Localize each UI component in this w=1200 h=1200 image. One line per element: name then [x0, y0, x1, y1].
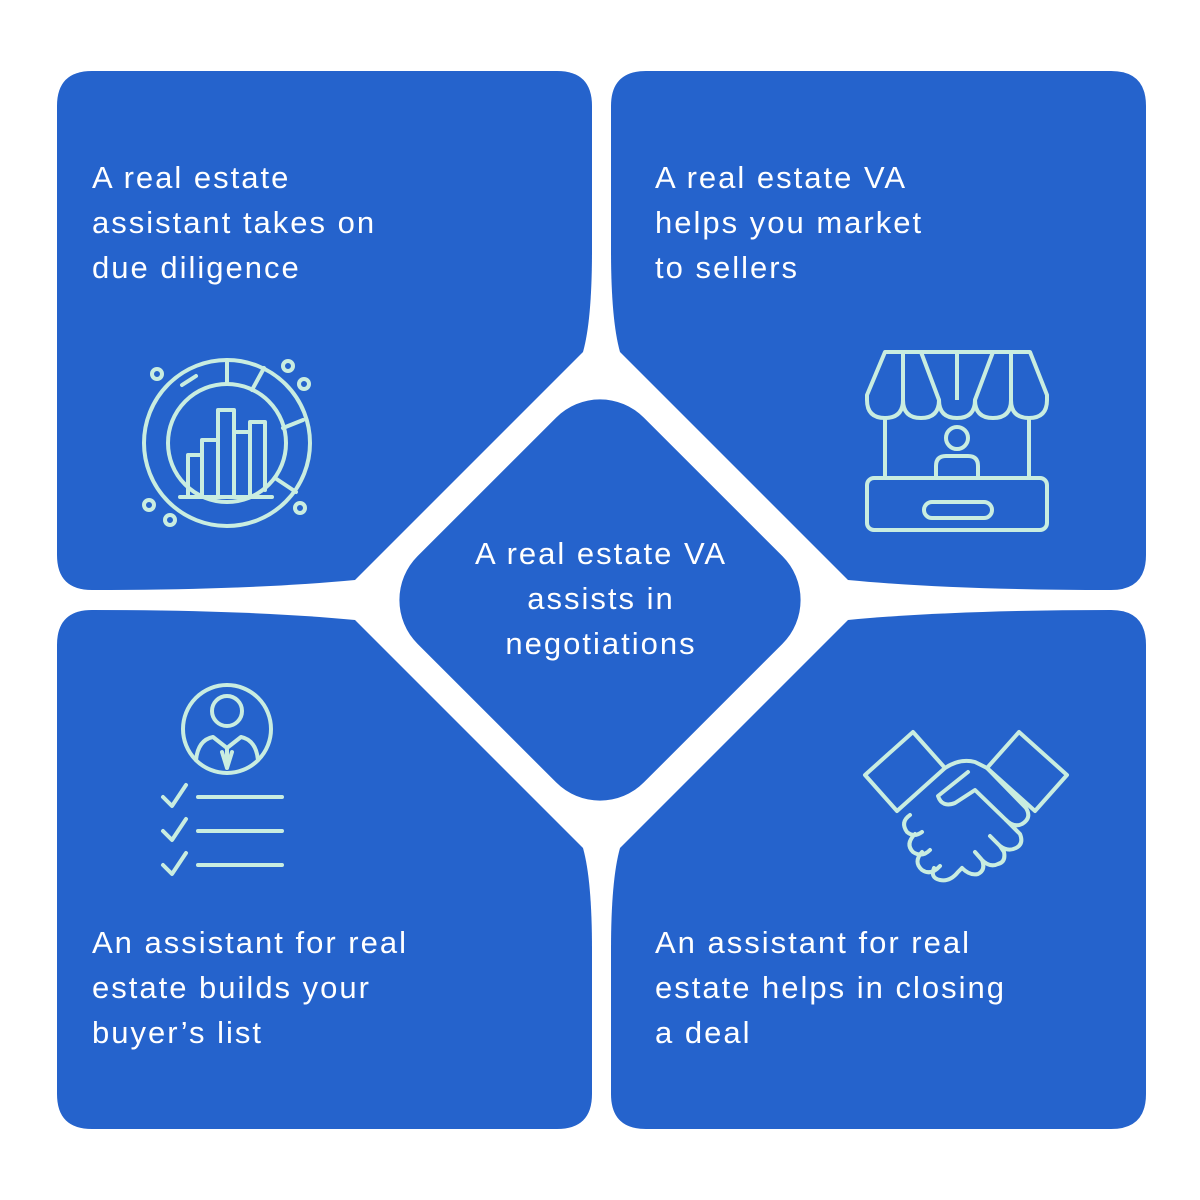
panel: negotiations center diamond — [374, 374, 826, 826]
text: due diligence: due diligence — [92, 250, 301, 285]
icon: chart donut — [144, 360, 310, 526]
text: due diligence: assistant takes on — [92, 205, 376, 240]
text: market to sellers: to sellers — [655, 250, 799, 285]
icon: handshake — [865, 732, 1067, 880]
text: closing a deal: a deal — [655, 1015, 751, 1050]
text: closing a deal: estate helps in closing — [655, 970, 1006, 1005]
text: negotiations: negotiations — [505, 626, 697, 661]
text: market to sellers: helps you market — [655, 205, 923, 240]
text: negotiations: A real estate VA — [475, 536, 727, 571]
panel: buyer's list — [57, 610, 592, 1129]
panel: market to sellers — [611, 71, 1146, 590]
icon: candidate checklist — [163, 685, 282, 874]
text: market to sellers: A real estate VA — [655, 160, 907, 195]
text: buyer's list: estate builds your — [92, 970, 371, 1005]
panel: due diligence — [57, 71, 592, 590]
text: negotiations: assists in — [527, 581, 675, 616]
text: buyer's list: buyer’s list — [92, 1015, 263, 1050]
text: closing a deal: An assistant for real — [655, 925, 971, 960]
panel: closing a deal — [611, 610, 1146, 1129]
text: due diligence: A real estate — [92, 160, 290, 195]
text: buyer's list: An assistant for real — [92, 925, 408, 960]
icon: market stall — [867, 352, 1047, 530]
